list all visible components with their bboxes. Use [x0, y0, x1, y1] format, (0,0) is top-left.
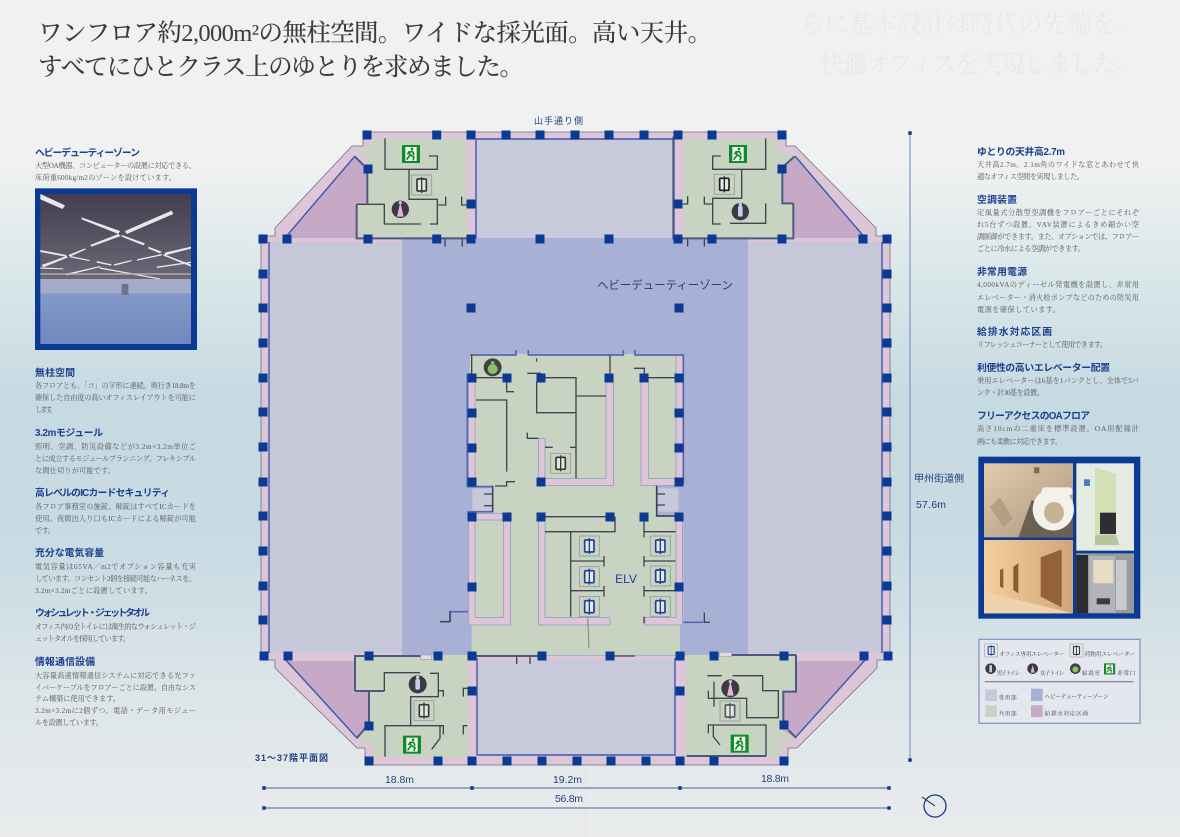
- text block: emergency power: [977, 265, 1139, 314]
- left text blocks: [35, 366, 196, 727]
- text block: OA floor: フリーアクセスのOAフロア: [977, 410, 1090, 422]
- text block: telecom: 大容量高速情報通信システムに対応できる光ファ: [35, 671, 196, 680]
- left text: heavy duty zone: [35, 146, 196, 182]
- text block: module: とに成立するモジュールプランニング。フレキシブル: [35, 454, 196, 463]
- text block: module: 照明、空調、防災設備などが3.2m×3.2m単位ご: [35, 442, 196, 451]
- bottom-left core room: [355, 655, 542, 757]
- text block: security: 使用。夜間出入り口もICカードによる解錠が可能: [35, 514, 196, 523]
- text block: washlet: ェットタオルを採用しています。: [35, 634, 130, 643]
- icon: freight elevator: [714, 174, 734, 194]
- text block: washlet: [35, 607, 196, 643]
- text block: module: [35, 427, 196, 475]
- text block: elevators: [977, 361, 1139, 397]
- icon: men's toilet: [409, 675, 427, 693]
- leased office area: [269, 242, 882, 653]
- text block: electric capacity: 3.2m×3.2mごとに設置しています。: [35, 586, 152, 595]
- icon: women's toilet: [392, 201, 409, 218]
- top central leased room: [476, 139, 674, 239]
- blue inner wall lines: [269, 139, 882, 755]
- legend: office elevator: [985, 644, 1065, 658]
- legend: emergency exit: [1104, 663, 1136, 677]
- label: ELV: ELV: [615, 572, 637, 586]
- building outline and perimeter wall: [261, 132, 890, 765]
- text block: security: 各フロア事務室の施錠、解錠はすべてICカードを: [35, 502, 196, 511]
- photo: pantry corridor: [1076, 463, 1134, 551]
- legend: heavy duty zone: [1031, 689, 1109, 701]
- text block: no columns: 確保した自由度の高いオフィスレイアウトを可能に: [35, 393, 196, 402]
- text block: module: な間仕切りが可能です。: [35, 466, 115, 475]
- core wall bands: [468, 355, 683, 625]
- core: [440, 350, 710, 656]
- top-left core room: [355, 138, 467, 247]
- text block: security: 高レベルのICカードセキュリティ: [35, 486, 170, 499]
- dimension: horizontal spans: [264, 773, 889, 808]
- legend: emergency exit: 非常口: [1117, 669, 1136, 677]
- legend: women's toilet: [1027, 663, 1065, 677]
- floor plan: [261, 132, 890, 765]
- legend: women's toilet: 女子トイレ: [1040, 669, 1065, 677]
- photo: office interior: [35, 188, 197, 350]
- text block: no columns: 各フロアとも、「コ」の字形に連続。奥行き18.8mを: [35, 381, 196, 390]
- text block: no columns: 無柱空間: [35, 366, 75, 379]
- icon: refreshment room: [484, 358, 502, 376]
- text block: security: [35, 486, 196, 535]
- legend: common area: [985, 705, 1017, 717]
- core common area: [468, 354, 683, 655]
- legend: freight elevator: 荷物用エレベーター: [1085, 650, 1136, 658]
- water zones: [284, 157, 866, 738]
- text block: telecom: テム構築に使用できます。: [35, 694, 120, 703]
- text block: emergency power: エレベーター・消火栓ポンプなどのための防災用: [977, 293, 1139, 302]
- text block: water supply: リフレッシュコーナーとして使用できます。: [977, 340, 1107, 349]
- icon: freight elevator: [414, 701, 434, 721]
- legend: [979, 639, 1140, 723]
- text block: electric capacity: [35, 546, 196, 595]
- legend: refreshment room: [1070, 663, 1100, 677]
- legend: common area: 共用部: [999, 709, 1017, 717]
- text block: electric capacity: しています。コンセント2個を接続可能なハーネスを、: [35, 574, 196, 583]
- icons: office elevators: [579, 536, 670, 617]
- bottom central leased room: [477, 660, 675, 755]
- label: floor plan caption: 31～37階平面図: [255, 753, 328, 763]
- text block: water supply: [977, 325, 1107, 349]
- structural columns: [263, 135, 888, 761]
- legend: leased area: 専用部: [999, 693, 1017, 701]
- text block: air conditioning: 空調装置: [977, 193, 1017, 206]
- legend: water zone: 給排水対応区画: [1045, 709, 1088, 717]
- icon: emergency exit: [402, 145, 420, 163]
- legend: leased area: [985, 689, 1017, 701]
- text block: elevators: 利便性の高いエレベーター配置: [977, 361, 1110, 374]
- icon: women's toilet: [721, 679, 739, 697]
- icon: emergency exit: [403, 736, 421, 754]
- legend: freight elevator: [1070, 644, 1136, 658]
- icon: freight elevator: [551, 453, 571, 473]
- dimension: horizontal spans: 18.8m: [761, 773, 789, 785]
- text block: air conditioning: [977, 193, 1139, 253]
- text block: air conditioning: ごとに冷水による空調ができます。: [977, 244, 1085, 253]
- text block: security: です。: [35, 527, 55, 535]
- text block: telecom: 情報通信設備: [35, 655, 95, 668]
- text block: air conditioning: 定風量式分散型空調機をフロアーごとにそれぞ: [977, 208, 1139, 217]
- label: heavy duty zone: ヘビーデューティーゾーン: [597, 278, 733, 292]
- text block: ceiling height: ゆとりの天井高2.7m: [977, 145, 1065, 158]
- text block: washlet: オフィス内の全トイレには衛生的なウォシュレット・ジ: [35, 622, 196, 631]
- text block: module: 3.2mモジュール: [35, 427, 103, 439]
- dimension: horizontal spans: 19.2m: [553, 774, 582, 786]
- faint show-through text: らに基本設計は時代の先端を。: [800, 10, 1140, 38]
- icon: freight elevator: [412, 175, 432, 195]
- text block: OA floor: 高さ10cmの二重床を標準設置。OA用配線計: [977, 424, 1139, 433]
- icon: emergency exit: [731, 735, 749, 753]
- photo: vending machines: [1076, 553, 1134, 613]
- text block: ceiling height: [977, 145, 1139, 181]
- legend: water zone: [1031, 705, 1088, 717]
- text block: electric capacity: 電気容量は65VA／m2でオプション容量も充実: [35, 562, 196, 571]
- icon: emergency exit: [729, 145, 747, 163]
- text block: no columns: [35, 366, 196, 414]
- text block: telecom: 3.2m×3.2mに2個ずつ、電話・データ用モジュー: [35, 706, 196, 715]
- text block: OA floor: 画にも柔軟に対応できます。: [977, 437, 1062, 446]
- text block: air conditioning: れ5台ずつ設置。VAV装置によるきめ細かい空: [977, 220, 1139, 229]
- photo: toilet: [984, 463, 1074, 537]
- title: ワンフロア約2,000m²の無柱空間。ワイドな採光面。高い天井。: [38, 19, 712, 47]
- text block: telecom: [35, 655, 196, 727]
- legend: heavy duty zone: ヘビーデューティーゾーン: [1045, 693, 1109, 701]
- dimension: vertical 57.6m: 57.6m: [916, 499, 946, 511]
- bottom-right core room: [687, 652, 796, 756]
- photo collage: [978, 457, 1140, 619]
- text block: elevators: 乗用エレベーターは6基を1バンクとし、全体で5バ: [977, 376, 1139, 385]
- core walls: [440, 350, 703, 622]
- label: Yamate-dori side: 山手通り側: [534, 115, 583, 126]
- text block: emergency power: 4,000kVAのディーゼル発電機を設置し、非常用: [977, 280, 1139, 289]
- text block: air conditioning: 調制御ができます。また、オプションでは、フロアー: [977, 232, 1139, 241]
- legend: refreshment room: 給湯室: [1082, 669, 1100, 677]
- text block: ceiling height: 適なオフィス空間を実現しました。: [977, 172, 1084, 181]
- top-right core room: [673, 137, 794, 247]
- icon: men's toilet: [732, 203, 749, 220]
- text block: washlet: ウォシュレット・ジェットタオル: [35, 607, 150, 619]
- faint show-through text: [800, 10, 1140, 78]
- left text: heavy duty zone: 大型OA機器、コンピューターの設置に対応できる、: [35, 161, 196, 170]
- text block: emergency power: 電源を確保しています。: [977, 305, 1060, 314]
- text block: telecom: イバーケーブルをフロアーごとに設置。自由なシス: [35, 683, 196, 692]
- icon: freight elevator: [720, 701, 740, 721]
- legend: men's toilet: [985, 663, 1020, 677]
- text block: no columns: します。: [35, 406, 57, 414]
- label: Koshu-kaido side: 甲州街道側: [914, 472, 964, 485]
- legend: office elevator: オフィス専用エレベーター: [999, 650, 1065, 658]
- text block: telecom: ルを設置しています。: [35, 718, 103, 727]
- text block: ceiling height: 天井高2.7m。2.1m角のワイドな窓とあわせて快: [977, 160, 1139, 169]
- icon: north compass: [922, 795, 946, 817]
- left text: heavy duty zone: ヘビーデューティーゾーン: [35, 146, 140, 159]
- right text blocks: [977, 145, 1139, 446]
- text block: OA floor: [977, 410, 1139, 446]
- title: [38, 19, 712, 81]
- common area corner rooms: [355, 139, 796, 757]
- text block: emergency power: 非常用電源: [977, 265, 1027, 278]
- text block: elevators: ンク・計30基を設置。: [977, 388, 1044, 397]
- dimension: horizontal spans: 56.8m: [555, 793, 583, 805]
- heavy duty zone: [402, 238, 748, 656]
- text block: water supply: 給排水対応区画: [977, 325, 1052, 338]
- faint show-through text: 快適オフィスを実現しました。: [820, 50, 1140, 78]
- photo: elevator hall: [984, 540, 1073, 613]
- dimension: horizontal spans: 18.8m: [385, 774, 414, 786]
- title: すべてにひとクラス上のゆとりを求めました。: [38, 53, 524, 81]
- left text: heavy duty zone: 床荷重600kg/m2のゾーンを設けています。: [35, 173, 176, 182]
- text block: electric capacity: 充分な電気容量: [35, 546, 104, 559]
- legend: men's toilet: 男子トイレ: [997, 669, 1020, 677]
